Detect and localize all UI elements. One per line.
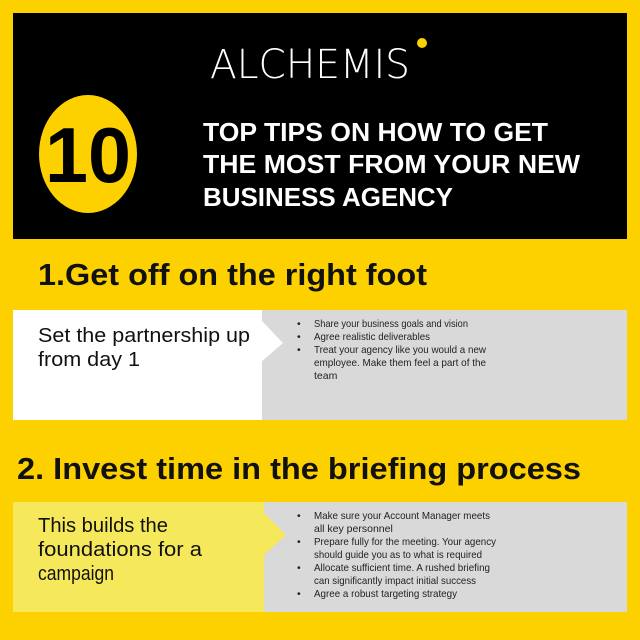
arrow — [263, 512, 286, 556]
bullets: Allocate sufficient time. A rushed briefing — [314, 562, 490, 574]
left text — [38, 325, 250, 371]
left text: campaign — [38, 563, 114, 585]
bullets: Agree a robust targeting strategy — [314, 588, 458, 600]
bullets — [297, 318, 486, 382]
bullets: • — [297, 536, 301, 548]
panel: tip 2 — [13, 502, 627, 612]
bullets: team — [314, 370, 338, 382]
left text: foundations for a — [38, 539, 203, 561]
bullets: • — [297, 331, 301, 343]
bullets: Agree realistic deliverables — [314, 331, 430, 343]
title: THE MOST FROM YOUR NEW — [203, 149, 580, 179]
bullets: • — [297, 510, 301, 522]
logo: ALCHEMIS — [210, 42, 410, 88]
bullets: Treat your agency like you would a new — [314, 344, 486, 356]
bullets: • — [297, 562, 301, 574]
title: BUSINESS AGENCY — [203, 182, 453, 212]
header panel — [13, 13, 627, 239]
heading 1: 1.Get off on the right foot — [38, 257, 427, 292]
bullets: employee. Make them feel a part of the — [314, 357, 486, 369]
bullets: should guide you as to what is required — [314, 549, 482, 561]
bullets: Share your business goals and vision — [314, 318, 468, 330]
left text: This builds the — [38, 515, 168, 537]
arrow — [261, 320, 283, 362]
bullets: can significantly impact initial success — [314, 575, 476, 587]
panel: tip 1 — [13, 310, 627, 420]
bullets: • — [297, 588, 301, 600]
badge: 10 — [39, 95, 137, 213]
heading 2: 2. Invest time in the briefing process — [17, 451, 581, 486]
bullets: Prepare fully for the meeting. Your agency — [314, 536, 497, 548]
bullets: • — [297, 318, 301, 330]
bullets: all key personnel — [314, 523, 393, 535]
bullets — [297, 510, 497, 600]
left text: from day 1 — [38, 349, 140, 371]
left text: Set the partnership up — [38, 325, 250, 347]
title — [203, 117, 580, 212]
bullets: Make sure your Account Manager meets — [314, 510, 490, 522]
badge: 10: 10 — [45, 111, 131, 199]
title: TOP TIPS ON HOW TO GET — [203, 117, 548, 147]
bullets: • — [297, 344, 301, 356]
left text — [38, 515, 203, 585]
